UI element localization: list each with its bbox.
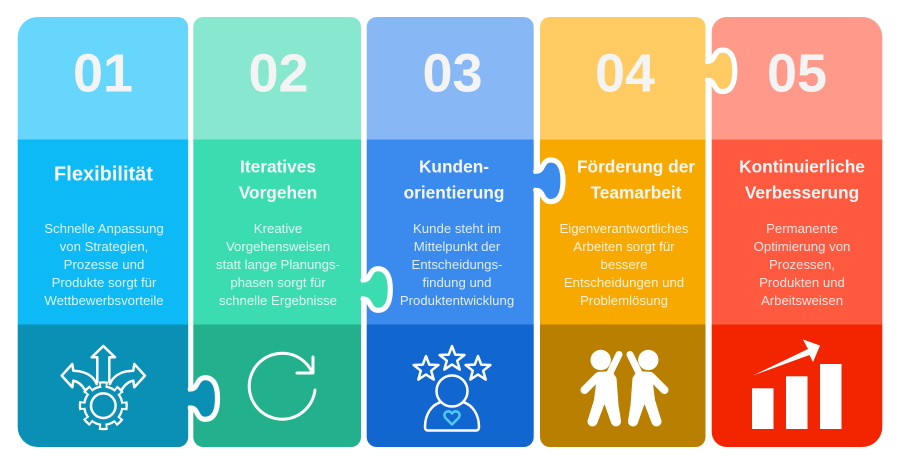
puzzle tab: 04 into 05 xyxy=(704,50,735,92)
bottom band 01 xyxy=(18,324,188,447)
puzzle tab: 03 into 04 xyxy=(533,160,563,202)
body text 01: Wettbewerbsvorteile xyxy=(44,293,164,308)
heading Flexibilität: Flexibilität xyxy=(54,164,153,186)
bottom band 04 xyxy=(540,324,706,447)
panel: 02 Iteratives Vorgehen xyxy=(193,17,361,447)
number 02: 02 xyxy=(248,44,309,104)
body text 05: Optimierung von xyxy=(754,239,850,254)
body text 01: Prozesse und xyxy=(64,257,144,272)
top band 04 xyxy=(540,17,706,140)
body text 03: Mittelpunkt der xyxy=(414,239,501,254)
bottom band 03 xyxy=(367,324,534,447)
middle band 04 xyxy=(540,140,706,324)
body text 02: phasen sorgt für xyxy=(230,275,326,290)
body text 05: Prozessen, xyxy=(769,257,835,272)
body text 04: Eigenverantwortliches xyxy=(559,221,689,236)
heading Kundenorientierung: orientierung xyxy=(404,182,504,202)
number 01: 01 xyxy=(73,44,133,104)
heading Kundenorientierung: Kunden- xyxy=(419,156,489,176)
top band 01 xyxy=(18,17,188,140)
heading Iteratives Vorgehen: Vorgehen xyxy=(239,182,317,202)
bottom band 02 xyxy=(193,324,361,447)
heading Kontinuierliche Verbesserung: Kontinuierliche xyxy=(739,156,865,176)
heading Förderung der Teamarbeit: Teamarbeit xyxy=(591,182,682,202)
heading Iteratives Vorgehen: Iteratives xyxy=(240,156,316,176)
number 05: 05 xyxy=(767,44,827,104)
body text 01: Produkte sorgt für xyxy=(52,275,157,290)
icon: growth bars with arrow xyxy=(752,340,842,429)
icon: customer with stars xyxy=(414,346,490,430)
body text 04: Arbeiten sorgt für xyxy=(573,239,675,254)
body text 05: Produkten und xyxy=(759,275,845,290)
top band 03 xyxy=(367,17,534,140)
icon: gear with arrows xyxy=(62,346,145,432)
body text 04: Entscheidungen und xyxy=(564,275,684,290)
body text 03: Kunde steht im xyxy=(413,221,501,236)
panel: 05 Kontinuierliche Verbesserung xyxy=(712,17,882,447)
heading Kontinuierliche Verbesserung: Verbesserung xyxy=(745,182,859,202)
number 03: 03 xyxy=(422,44,483,104)
body text 05: Arbeitsweisen xyxy=(761,293,843,308)
panel: 04 Förderung der Teamarbeit xyxy=(540,17,706,447)
top band 02 xyxy=(193,17,361,140)
panel: 03 Kundenorientierung xyxy=(367,17,534,447)
puzzle tab: 02 into 03 xyxy=(360,269,390,310)
body text 01: Schnelle Anpassung xyxy=(44,221,164,236)
middle band 01 xyxy=(18,140,188,324)
bottom band 05 xyxy=(712,324,882,447)
puzzle tab: 01 into 02 xyxy=(187,378,218,419)
icon: two people high five xyxy=(584,350,664,426)
body text 04: bessere xyxy=(601,257,647,272)
body text 04: Problemlösung xyxy=(580,293,668,308)
heading Förderung der Teamarbeit: Förderung der xyxy=(577,156,695,176)
body text 02: statt lange Planungs- xyxy=(216,257,340,272)
top band 05 xyxy=(712,17,882,140)
middle band 03 xyxy=(367,140,534,324)
icon: refresh arrow xyxy=(249,353,315,419)
panel: 01 Flexibilität xyxy=(18,17,188,447)
body text 03: Produktentwicklung xyxy=(400,293,514,308)
middle band 02 xyxy=(193,140,361,324)
body text 02: schnelle Ergebnisse xyxy=(219,293,337,308)
number 04: 04 xyxy=(595,44,655,104)
body text 05: Permanente xyxy=(766,221,838,236)
middle band 05 xyxy=(712,140,882,324)
body text 01: von Strategien, xyxy=(60,239,148,254)
body text 03: Entscheidungs- xyxy=(412,257,502,272)
body text 02: Kreative xyxy=(254,221,302,236)
body text 02: Vorgehensweisen xyxy=(226,239,330,254)
body text 03: findung und xyxy=(423,275,491,290)
